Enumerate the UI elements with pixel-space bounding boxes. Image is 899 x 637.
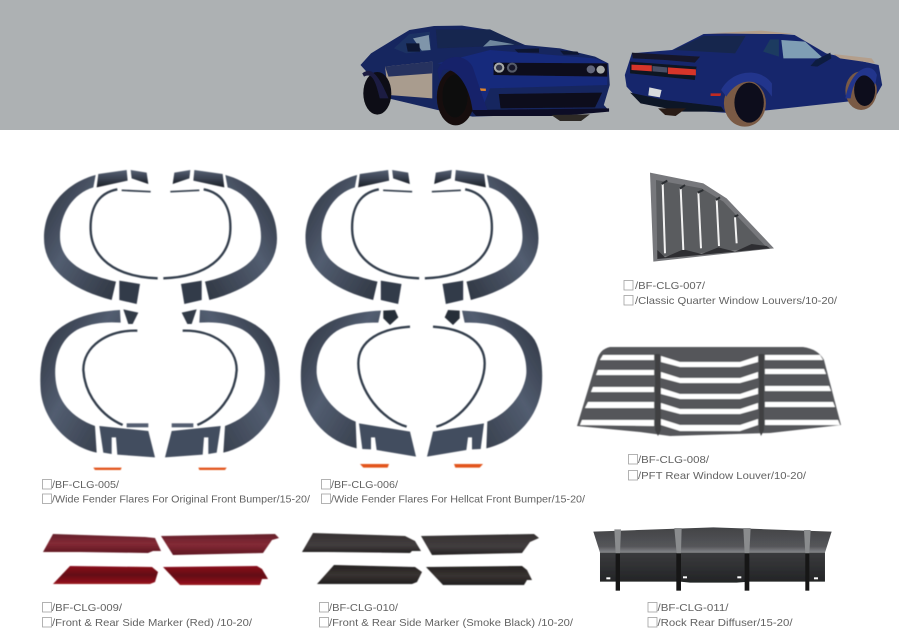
label: BF-CLG-008: /BF-CLG-008/ (638, 454, 709, 466)
label: BF-CLG-010: /Front & Rear Side Marker (Smoke Black) /10-20/ (329, 617, 573, 629)
product: BF-CLG-005 wide fender flares, upper set (44, 170, 277, 304)
label: BF-CLG-009 (42, 602, 252, 629)
product: BF-CLG-010 smoke black side markers (302, 533, 539, 585)
label: BF-CLG-010: /BF-CLG-010/ (329, 602, 398, 614)
label: BF-CLG-008: /PFT Rear Window Louver/10-20/ (638, 470, 806, 482)
product: BF-CLG-008 rear window louver (577, 347, 841, 436)
photo: rear three-quarter view of blue car (625, 31, 882, 127)
label: BF-CLG-011: /BF-CLG-011/ (658, 602, 729, 614)
label: BF-CLG-007: /Classic Quarter Window Louvers/10-20/ (635, 295, 837, 307)
label: BF-CLG-011 (648, 602, 793, 629)
label: BF-CLG-009: /BF-CLG-009/ (52, 602, 122, 614)
product: BF-CLG-005 wide fender flares, lower set (40, 309, 280, 470)
label: BF-CLG-006: /Wide Fender Flares For Hellcat Front Bumper/15-20/ (331, 494, 585, 506)
label: BF-CLG-005 (42, 479, 310, 506)
product: BF-CLG-007 quarter window louver (650, 173, 774, 262)
label: BF-CLG-007 (624, 280, 837, 307)
label: BF-CLG-011: /Rock Rear Diffuser/15-20/ (658, 617, 793, 629)
header band (0, 0, 899, 130)
label: BF-CLG-006: /BF-CLG-006/ (331, 479, 398, 491)
label: BF-CLG-007: /BF-CLG-007/ (635, 280, 705, 292)
product: BF-CLG-011 rear diffuser (593, 527, 832, 591)
label: BF-CLG-008 (628, 454, 806, 482)
product: BF-CLG-006 wide fender flares, upper set (305, 170, 539, 304)
label: BF-CLG-005: /Wide Fender Flares For Original Front Bumper/15-20/ (52, 494, 310, 506)
photo: front three-quarter view of blue car (361, 26, 610, 125)
label: BF-CLG-006 (322, 479, 585, 506)
label: BF-CLG-005: /BF-CLG-005/ (52, 479, 119, 491)
product: BF-CLG-006 wide fender flares, lower set (301, 310, 542, 468)
label: BF-CLG-009: /Front & Rear Side Marker (Red) /10-20/ (52, 617, 252, 629)
product: BF-CLG-009 red side markers (43, 534, 279, 585)
label: BF-CLG-010 (320, 602, 573, 629)
